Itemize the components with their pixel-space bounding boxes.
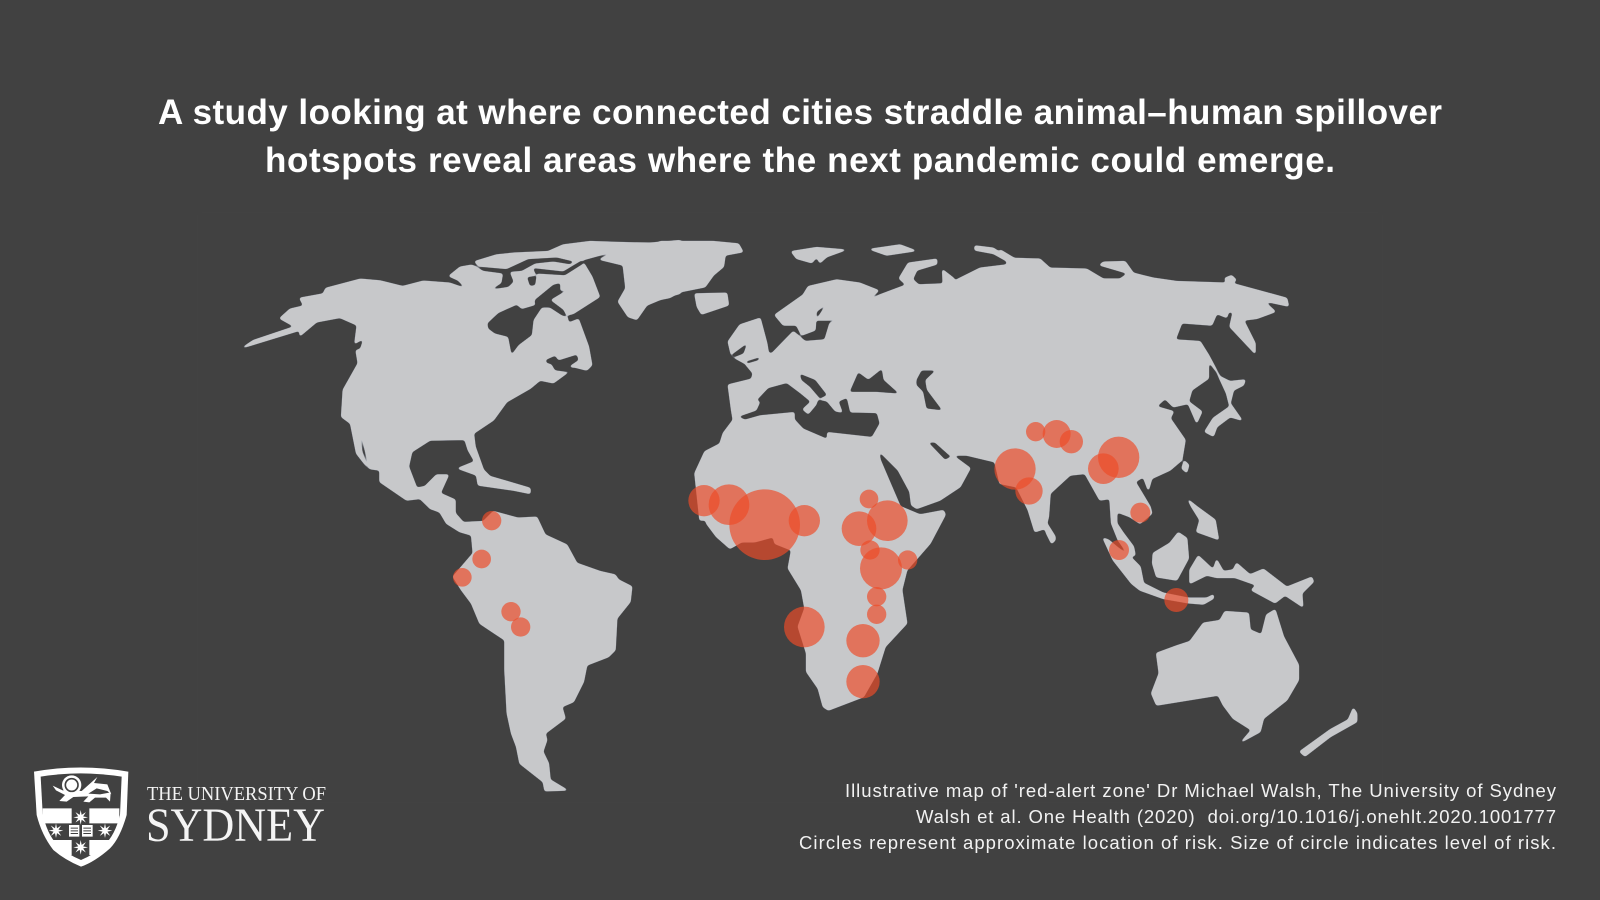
logo: The University of Sydney <box>34 767 326 867</box>
title: A study looking at where connected cities straddle animal–human spillover <box>158 93 1442 132</box>
title: hotspots reveal areas where the next pandemic could emerge. <box>265 141 1335 180</box>
title <box>158 93 1442 180</box>
source and caption text: Walsh et al. One Health (2020) doi.org/10.1016/j.onehlt.2020.1001777 <box>916 806 1556 827</box>
risk circles: Indonesia <box>1109 540 1188 612</box>
icon: crest stars <box>49 810 112 855</box>
logo wordmark: SYDNEY <box>146 799 325 852</box>
risk circles: South America and Africa <box>453 484 917 698</box>
landmass: East Asia and India <box>995 250 1288 557</box>
world map <box>200 215 1380 800</box>
landmass: Africa and South America <box>430 447 945 791</box>
landmass: North America <box>243 241 680 523</box>
landmass: Southeast Asia, Australia and New Zealand <box>1103 500 1357 756</box>
landmasses with smoothed coastlines <box>200 215 1380 800</box>
icon: university crest <box>34 767 128 867</box>
icon: open book <box>69 825 93 837</box>
risk circles: Asia <box>994 420 1150 523</box>
landmass: Greenland, Iceland and Eurasia west <box>660 242 1127 520</box>
source and caption text: Illustrative map of 'red-alert zone' Dr Michael Walsh, The University of Sydney <box>845 780 1557 801</box>
source and caption text <box>799 780 1557 853</box>
logo wordmark: THE UNIVERSITY OF <box>147 783 326 805</box>
source and caption text: Circles represent approximate location of risk. Size of circle indicates level of risk. <box>799 832 1556 853</box>
